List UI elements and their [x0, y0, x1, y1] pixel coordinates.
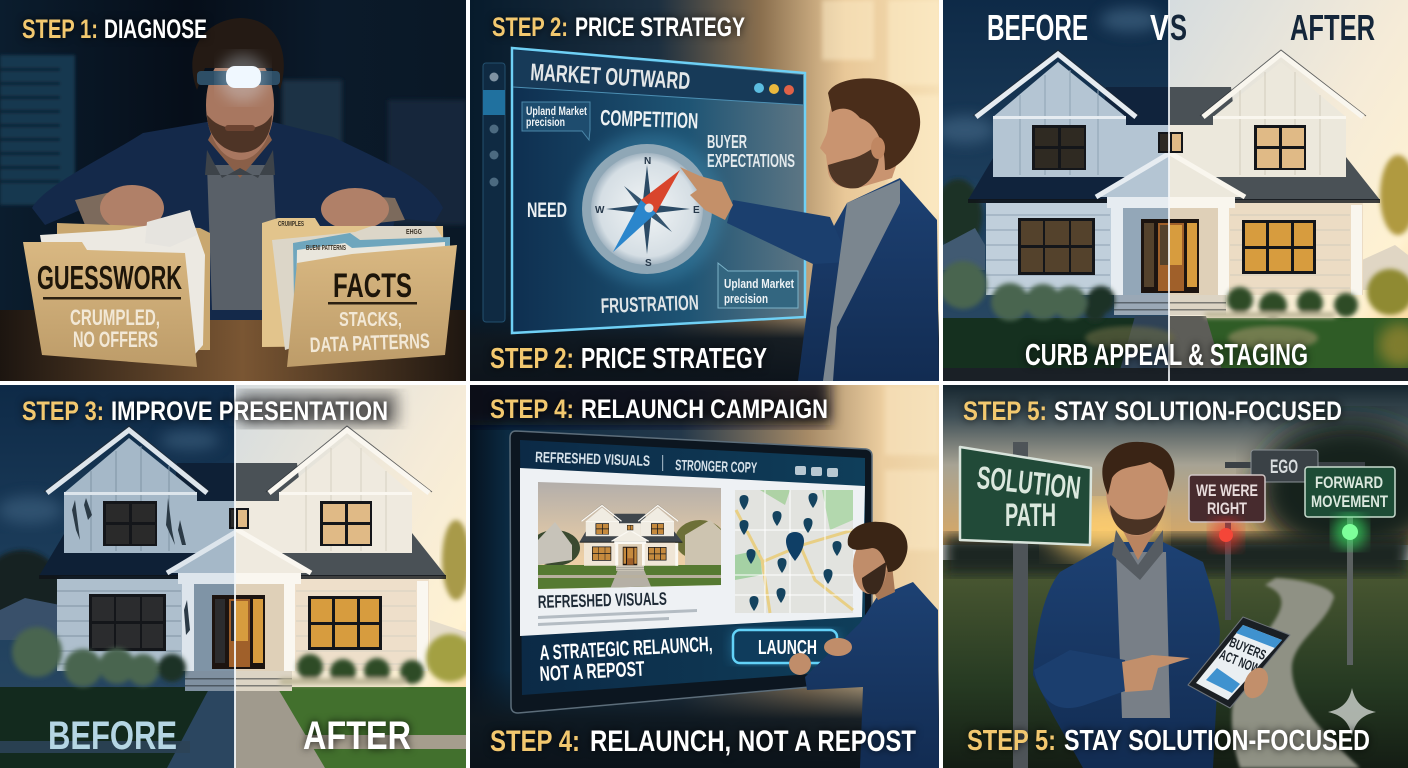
house after side	[34, 426, 446, 691]
callout: upland market lower: Upland Market	[724, 276, 795, 291]
step 4 heading: RELAUNCH CAMPAIGN	[581, 394, 828, 424]
house before side	[968, 50, 1380, 315]
sign: forward movement with green light: MOVEMENT	[1311, 493, 1388, 511]
folder: facts: EHGG	[406, 227, 422, 236]
panel: step 5 stay solution-focused	[943, 385, 1408, 768]
folder: guesswork: GUESSWORK	[37, 259, 182, 296]
step 2 heading: PRICE STRATEGY	[575, 12, 745, 42]
compass: N	[644, 156, 651, 167]
map	[735, 490, 853, 613]
man at screen	[789, 522, 939, 768]
walkway right	[1169, 316, 1222, 370]
man with tablet	[1033, 442, 1290, 768]
step 4 heading: STEP 4:	[490, 394, 574, 424]
step 2 caption: STEP 2:	[490, 343, 574, 375]
decorative bars	[538, 609, 697, 626]
lawn left	[943, 318, 1134, 368]
window blinds	[0, 55, 75, 205]
sign: forward movement with green light	[1305, 467, 1395, 665]
dusk sky	[0, 385, 235, 768]
sunset sky	[943, 385, 1408, 545]
step 2 heading: STEP 2:	[492, 12, 568, 42]
callout: upland market	[522, 102, 590, 140]
picture frame	[282, 80, 342, 145]
market outward screen: MARKET OUTWARD	[530, 59, 691, 95]
walkway left	[167, 687, 235, 768]
label: competition: COMPETITION	[600, 105, 699, 133]
neighbour house right	[1362, 245, 1408, 290]
label: after: AFTER	[303, 714, 411, 758]
tree right	[442, 520, 470, 600]
screen header: STRONGER COPY	[675, 457, 757, 477]
label: before: BEFORE	[987, 7, 1088, 48]
screen header: REFRESHED VISUALS	[535, 449, 650, 470]
paint damage	[72, 498, 190, 635]
headlamp	[219, 54, 267, 102]
divider	[1168, 0, 1170, 381]
sunlit window	[885, 385, 939, 550]
heading: IMPROVE PRESENTATION	[111, 396, 388, 426]
folder: facts: DATA PATTERNS	[309, 330, 430, 357]
label: vs	[1150, 7, 1187, 48]
sign: we were right with red light: RIGHT	[1207, 500, 1247, 518]
house after side	[968, 50, 1380, 315]
label: after: AFTER	[1290, 7, 1375, 48]
panel: step 4 relaunch campaign	[460, 375, 939, 768]
floor shadow	[470, 310, 939, 381]
window dots	[754, 83, 794, 95]
walkway right	[235, 687, 325, 768]
treeline	[943, 535, 1408, 575]
step 5 heading: STAY SOLUTION-FOCUSED	[1054, 396, 1342, 426]
step 2 caption: PRICE STRATEGY	[581, 343, 767, 375]
sign: solution path: SOLUTION	[975, 459, 1082, 506]
tree left	[0, 550, 62, 630]
heading	[22, 18, 206, 39]
divider	[234, 385, 236, 768]
folder: guesswork: NO OFFERS	[73, 327, 158, 352]
top shade	[460, 375, 830, 425]
neighbour house	[943, 228, 985, 270]
step 5 heading	[963, 396, 1342, 426]
sunset sky	[1170, 0, 1408, 318]
office backdrop	[0, 0, 466, 310]
label: before: BEFORE	[48, 714, 177, 758]
sidewalk	[0, 741, 190, 753]
panel: step 2 price strategy	[470, 0, 940, 381]
label: buyer expectations: BUYER	[707, 132, 747, 152]
neighbour house right	[430, 620, 466, 660]
sunlit window	[822, 0, 940, 215]
tagline: NOT A REPOST	[539, 658, 645, 686]
panel: step 3 improve presentation	[0, 385, 474, 768]
label: vs: V	[1150, 7, 1169, 48]
step 5 heading: STEP 5:	[963, 396, 1047, 426]
callout: upland market lower	[718, 263, 798, 308]
neighbour house	[0, 598, 60, 640]
step 4 heading	[490, 394, 828, 424]
screen header	[535, 449, 838, 477]
clouds	[0, 430, 220, 524]
folder: guesswork: CRUMPLED,	[70, 305, 160, 330]
tree right	[1380, 155, 1408, 235]
compass: E	[693, 205, 700, 216]
step 4 caption: RELAUNCH, NOT A REPOST	[590, 725, 916, 758]
lawn left	[0, 687, 235, 768]
step 4 caption	[490, 725, 916, 758]
label: vs: S	[1170, 7, 1187, 48]
lawn right	[1206, 318, 1408, 368]
shrubs	[12, 627, 474, 687]
dark trees right	[1255, 420, 1408, 560]
tablet: BUYERS	[1227, 634, 1268, 663]
sun glow	[1050, 502, 1160, 558]
winding path	[1232, 578, 1360, 768]
folder: facts	[262, 218, 457, 367]
heading: STEP 1:	[22, 14, 98, 44]
step 5 caption	[967, 725, 1370, 757]
room backdrop	[470, 0, 939, 381]
shrubs	[939, 261, 1408, 322]
tablet	[1188, 617, 1290, 708]
field	[943, 560, 1408, 768]
step 5 caption: STEP 5:	[967, 725, 1056, 757]
label: frustration: FRUSTRATION	[600, 292, 699, 318]
heading: DIAGNOSE	[104, 14, 207, 44]
sidewalk right	[300, 735, 466, 749]
sun on lawn	[1378, 323, 1408, 367]
sign: solution path	[960, 442, 1091, 768]
street	[943, 368, 1408, 381]
heading shade	[238, 392, 398, 426]
sign: we were right with red light	[1189, 475, 1265, 620]
room backdrop	[470, 385, 939, 768]
tagline	[539, 633, 713, 686]
sign: ego: EGO	[1270, 457, 1298, 478]
callout: upland market: precision	[526, 117, 565, 129]
callout: upland market lower: precision	[724, 291, 768, 306]
sign: solution path: PATH	[1005, 497, 1056, 533]
relaunch screen	[510, 431, 872, 713]
sign: ego	[1225, 450, 1365, 482]
floor shadow	[470, 670, 939, 768]
heading	[22, 396, 388, 426]
app sidebar	[483, 63, 505, 322]
man with headlamp	[32, 18, 443, 320]
sign: forward movement with green light: FORWARD	[1315, 474, 1383, 492]
heading: STEP 3:	[22, 396, 104, 426]
folder: facts: FACTS	[333, 267, 412, 305]
step 2 caption	[490, 348, 767, 368]
market outward screen	[512, 48, 805, 333]
hand holding tablet	[1239, 664, 1273, 702]
tagline: A STRATEGIC RELAUNCH,	[539, 633, 713, 665]
listing photo	[530, 482, 725, 589]
panel: step 1 diagnose	[0, 0, 466, 381]
label: refreshed visuals: REFRESHED VISUALS	[538, 589, 667, 612]
decorative grasses right	[1228, 326, 1318, 350]
sparkle icon	[1328, 688, 1376, 736]
launch button: LAUNCH	[758, 637, 817, 659]
compass: W	[595, 205, 605, 216]
man pointing	[680, 78, 939, 381]
folder: facts: STACKS,	[339, 309, 402, 331]
sign: we were right with red light: WE WERE	[1196, 482, 1258, 500]
folder: guesswork	[23, 210, 210, 367]
folder: facts: CRUMPLES	[278, 219, 304, 228]
label: buyer expectations: EXPECTATIONS	[707, 151, 795, 171]
folder: facts: BUENI PATTERNS	[306, 243, 346, 252]
tablet: ACT NOW	[1217, 646, 1263, 677]
lawn right	[235, 687, 466, 768]
compass	[571, 133, 723, 285]
house before side	[39, 426, 451, 691]
dusk sky	[943, 0, 1169, 318]
sunset sky	[235, 385, 466, 768]
tree left	[943, 176, 985, 245]
launch button	[733, 630, 837, 663]
clouds	[943, 2, 1162, 148]
decorative grasses	[1085, 326, 1175, 350]
main pin	[786, 532, 804, 561]
step 2 heading	[492, 14, 748, 40]
callout: upland market: Upland Market	[526, 106, 587, 118]
step 4 caption: STEP 4:	[490, 725, 580, 758]
bookshelf	[388, 100, 466, 225]
compass: S	[645, 258, 652, 269]
table	[0, 310, 466, 381]
label: need: NEED	[527, 199, 567, 222]
panel: before vs after house	[934, 0, 1408, 381]
walkway	[1120, 316, 1169, 370]
label: buyer expectations	[708, 135, 794, 167]
